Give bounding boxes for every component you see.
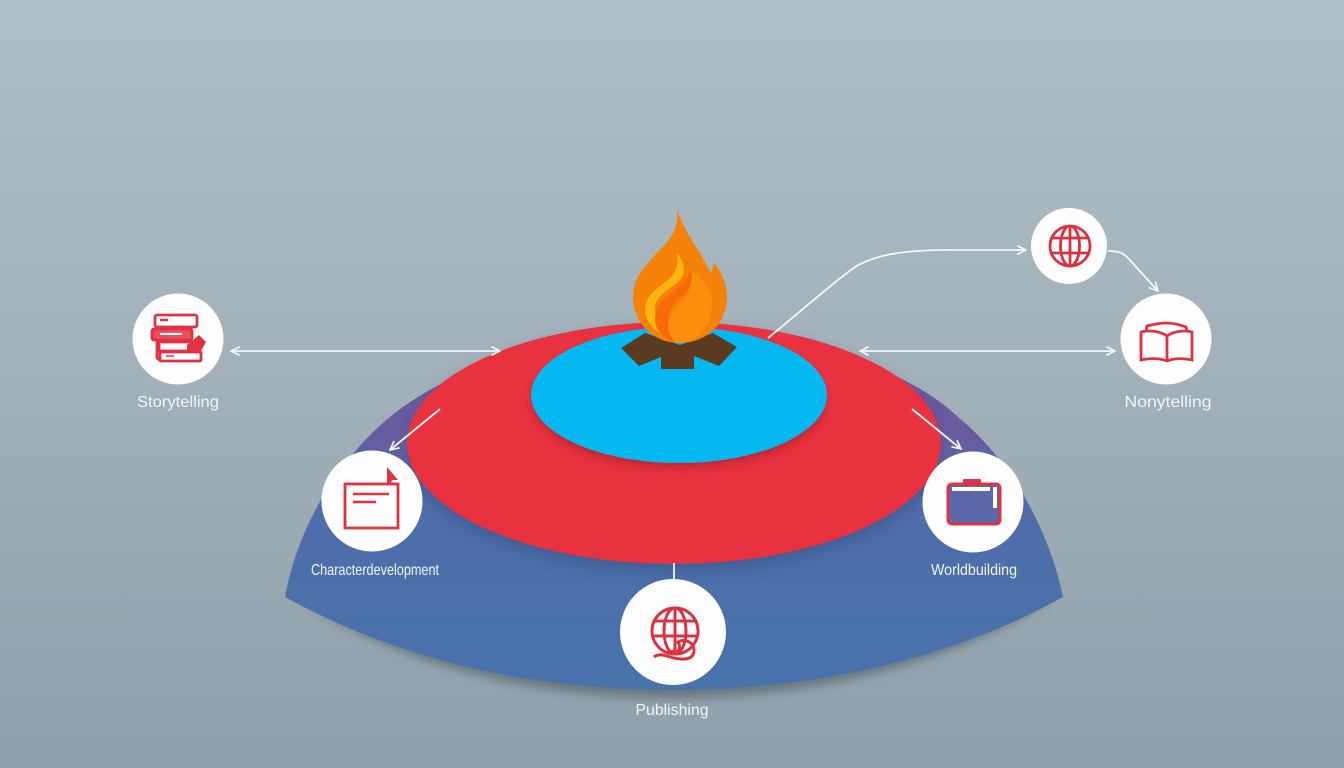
cyan centre layer [531, 327, 827, 463]
arrow: centre to globe [768, 250, 1026, 338]
campfire logs [621, 333, 737, 369]
dome shadow [300, 600, 1050, 698]
node circle [620, 579, 726, 685]
arrow: to character development [390, 409, 440, 450]
flame yellow inner [645, 253, 684, 334]
node: worldbuilding [922, 452, 1024, 579]
node circle [132, 294, 224, 384]
label: worldbuilding: Worldbuilding [931, 562, 1017, 579]
icon: document with marker [345, 467, 398, 528]
node: globe [1031, 208, 1107, 284]
icon: book stack [152, 315, 206, 361]
node circle [1120, 294, 1212, 384]
arrow: to worldbuilding [912, 409, 961, 449]
cyan ellipse shadow [532, 334, 826, 468]
node: character development [311, 450, 439, 579]
red middle layer [407, 322, 941, 564]
node: nonytelling [1120, 294, 1212, 411]
arrow: centre to nonytelling [860, 350, 1115, 352]
connector: to publishing [673, 563, 675, 581]
node: storytelling [132, 294, 224, 411]
red ellipse shadow [408, 329, 940, 571]
flame outer [633, 210, 727, 343]
label: publishing: Publishing [636, 702, 708, 719]
arrow: storytelling to centre [231, 350, 500, 352]
icon: globe [1050, 226, 1090, 266]
icon: folder [948, 479, 1000, 524]
icon: open book [1141, 323, 1192, 361]
node circle [1031, 208, 1107, 284]
icon: globe with hand [652, 608, 698, 659]
icon: campfire [621, 210, 737, 369]
arrow: globe to book [1108, 251, 1158, 291]
node: publishing [620, 579, 726, 719]
flame orange swirl [655, 270, 692, 342]
node circle [322, 450, 422, 552]
node circle [922, 452, 1024, 552]
flame core [668, 271, 712, 343]
label: nonytelling: Nonytelling [1124, 394, 1212, 411]
outer dome layer [285, 345, 1063, 690]
label: storytelling: Storytelling [137, 394, 219, 411]
label: character development: Characterdevelopment [311, 562, 439, 579]
